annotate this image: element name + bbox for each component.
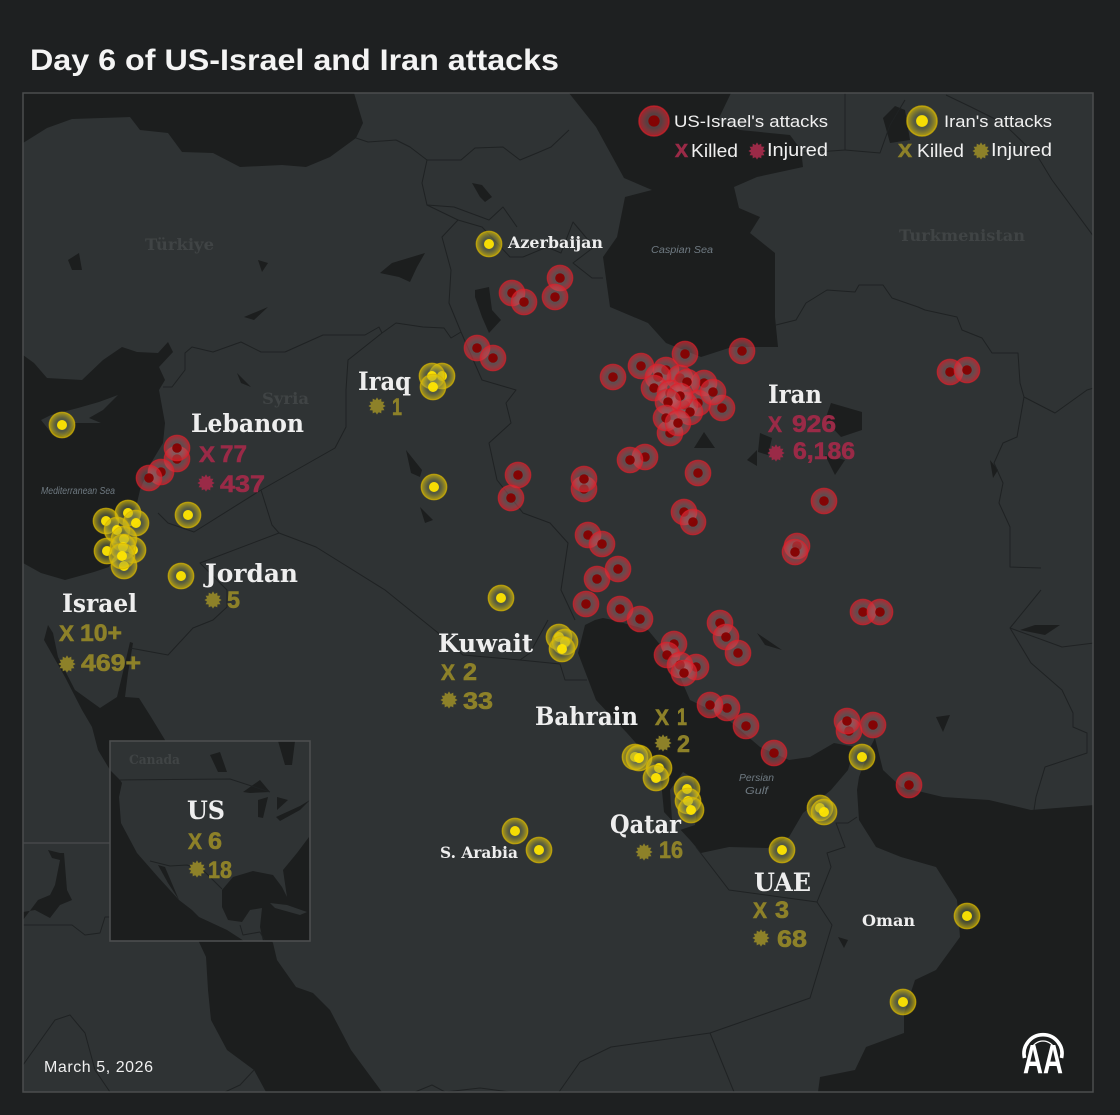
label: Israel: X bbox=[59, 621, 74, 646]
panel: US inset bbox=[110, 741, 310, 941]
label: Iran: X bbox=[768, 412, 782, 437]
water: Persian Gulf bbox=[578, 618, 855, 853]
map label: Persian Gulf bbox=[739, 774, 774, 794]
label: S. Arabia: S. Arabia bbox=[440, 843, 518, 862]
logo: AA bbox=[1023, 1035, 1063, 1082]
legend: Iran's attacks: Killed bbox=[917, 141, 964, 161]
map label: Turkmenistan: Turkmenistan bbox=[899, 226, 1025, 245]
label: Iraq: Iraq bbox=[358, 367, 411, 396]
label: Israel: Israel bbox=[62, 589, 137, 618]
label: Kuwait: X bbox=[441, 660, 455, 685]
label: US: 18 bbox=[208, 857, 232, 884]
label: Jordan: Jordan bbox=[203, 559, 298, 588]
label: UAE: X bbox=[753, 898, 767, 923]
land: Qatar bbox=[670, 772, 698, 830]
water: Caspian Sea bbox=[569, 93, 803, 357]
label: US: X bbox=[188, 829, 202, 854]
label: Bahrain: 2 bbox=[677, 731, 690, 758]
map label: Persian Gulf: Persian bbox=[739, 773, 774, 784]
label: Kuwait bbox=[439, 633, 533, 710]
label: UAE: 68 bbox=[777, 926, 807, 953]
label: Bahrain: Bahrain bbox=[535, 702, 638, 731]
label: US: US bbox=[187, 796, 225, 825]
legend: US-Israel's attacks: US-Israel's attacks bbox=[674, 112, 828, 131]
map label: Canada: Canada bbox=[129, 753, 181, 768]
label: Jordan bbox=[203, 563, 298, 608]
logo: AA: AA bbox=[1023, 1036, 1063, 1082]
title: Day 6 of US-Israel and Iran attacks bbox=[30, 44, 559, 77]
label: Bahrain bbox=[536, 706, 690, 752]
label: Lebanon: 77 bbox=[220, 441, 247, 468]
label: US: 6 bbox=[208, 828, 222, 855]
label: Qatar bbox=[610, 814, 682, 860]
label: Israel: 10+ bbox=[80, 620, 122, 647]
label: Israel bbox=[59, 589, 141, 677]
label: Lebanon: Lebanon bbox=[191, 409, 304, 438]
water: Red Sea bbox=[44, 625, 382, 1092]
label: Israel: 469+ bbox=[81, 650, 141, 677]
label: UAE: UAE bbox=[754, 868, 811, 897]
label: Kuwait: 2 bbox=[463, 659, 477, 686]
label: Iran: 6,186 bbox=[793, 438, 855, 465]
map label: Syria: Syria bbox=[262, 389, 309, 408]
legend: Iran's attacks bbox=[898, 106, 1052, 161]
map label: Caspian Sea: Caspian Sea bbox=[651, 245, 713, 256]
label: Lebanon bbox=[192, 413, 304, 492]
legend: Iran's attacks: Iran's attacks bbox=[944, 112, 1052, 131]
legend: US-Israel's attacks: Injured bbox=[767, 140, 828, 160]
label: Bahrain: 1 bbox=[677, 704, 687, 731]
water: Gulf of Oman and Arabian Sea bbox=[818, 738, 1094, 1092]
map label: Türkiye: Türkiye bbox=[145, 235, 214, 254]
water: Mediterranean Sea bbox=[23, 342, 173, 580]
label: Bahrain: X bbox=[655, 705, 669, 730]
label: Kuwait: Kuwait bbox=[438, 629, 533, 658]
label: UAE: 3 bbox=[775, 897, 789, 924]
label: Iran: Iran bbox=[768, 380, 822, 409]
legend: Iran's attacks: Injured bbox=[991, 140, 1052, 160]
legend: US-Israel's attacks bbox=[639, 106, 828, 161]
label: Kuwait: 33 bbox=[463, 688, 493, 715]
label: Oman: Oman bbox=[862, 911, 915, 930]
label: Iraq bbox=[359, 372, 410, 416]
legend: Iran's attacks: X bbox=[898, 141, 912, 161]
label: Qatar: Qatar bbox=[610, 810, 682, 839]
water: Aral Sea bbox=[883, 106, 910, 143]
label: Lebanon: X bbox=[199, 442, 215, 467]
water: Black Sea bbox=[23, 93, 363, 167]
markers: US-Israel's attacks bbox=[136, 265, 980, 798]
lakes bbox=[23, 183, 1060, 948]
land: Cyprus bbox=[41, 395, 118, 437]
label: Lebanon: 437 bbox=[220, 471, 265, 498]
label: Iran: 926 bbox=[792, 411, 836, 438]
markers: Iran's attacks bbox=[49, 231, 980, 1015]
label: UAE bbox=[752, 872, 810, 948]
legend: US-Israel's attacks: X bbox=[675, 141, 688, 161]
label: Azerbaijan: Azerbaijan bbox=[507, 233, 603, 252]
map label: Persian Gulf: Gulf bbox=[745, 786, 770, 797]
label: Qatar: 16 bbox=[659, 837, 683, 864]
label: Iran bbox=[768, 380, 855, 465]
map label: Mediterranean Sea: Mediterranean Sea bbox=[41, 486, 115, 497]
legend: US-Israel's attacks: Killed bbox=[691, 141, 738, 161]
label: Jordan: 5 bbox=[227, 587, 240, 614]
label: US bbox=[188, 800, 232, 878]
label: Iraq: 1 bbox=[392, 394, 402, 421]
date: March 5, 2026 bbox=[44, 1059, 153, 1076]
inset divider bbox=[24, 842, 110, 844]
